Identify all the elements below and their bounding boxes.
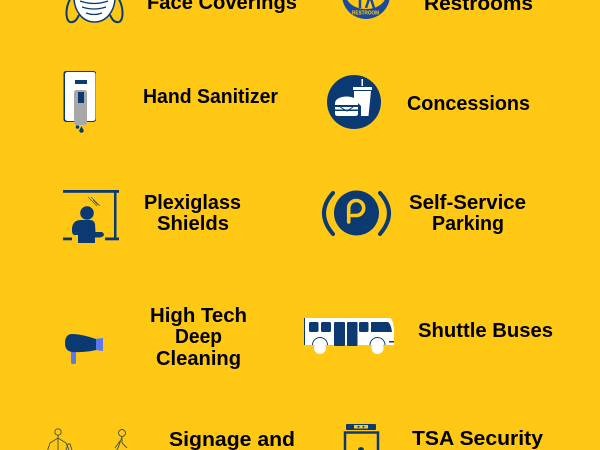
heading: Hand Sanitizer: Hand Sanitizer [143,86,278,108]
heading: Self-Service Parking [409,192,526,235]
label: restroom sign text: RESTROOM [352,10,379,16]
heading: Shuttle Buses: Shuttle Buses [418,320,553,342]
icon: hair dryer [65,334,103,364]
icon: walking figures [47,429,127,450]
heading: Plexiglass Shields [144,192,241,235]
heading: Self-Service Parking: Parking [432,213,504,235]
icon: hand sanitizer dispenser [64,71,96,133]
icon: TSA security [345,424,378,450]
heading: High Tech Deep Cleaning [150,305,247,370]
icon: shuttle bus [304,318,394,354]
icon: face mask [66,0,123,22]
icon: restroom sign [342,0,390,19]
icon: person behind plexiglass [63,190,119,243]
icon: parking [324,190,389,236]
heading: Self-Service Parking: Self-Service [409,192,526,214]
heading: Plexiglass Shields: Plexiglass [144,192,241,214]
heading: Plexiglass Shields: Shields [157,213,229,235]
heading: High Tech Deep Cleaning: Deep [175,326,222,348]
heading: High Tech Deep Cleaning: Cleaning [156,348,241,370]
heading: TSA Security: TSA Security [412,428,544,450]
heading: High Tech Deep Cleaning: High Tech [150,305,247,327]
icon: burger and drink [327,75,381,129]
heading: Concessions: Concessions [407,93,530,115]
